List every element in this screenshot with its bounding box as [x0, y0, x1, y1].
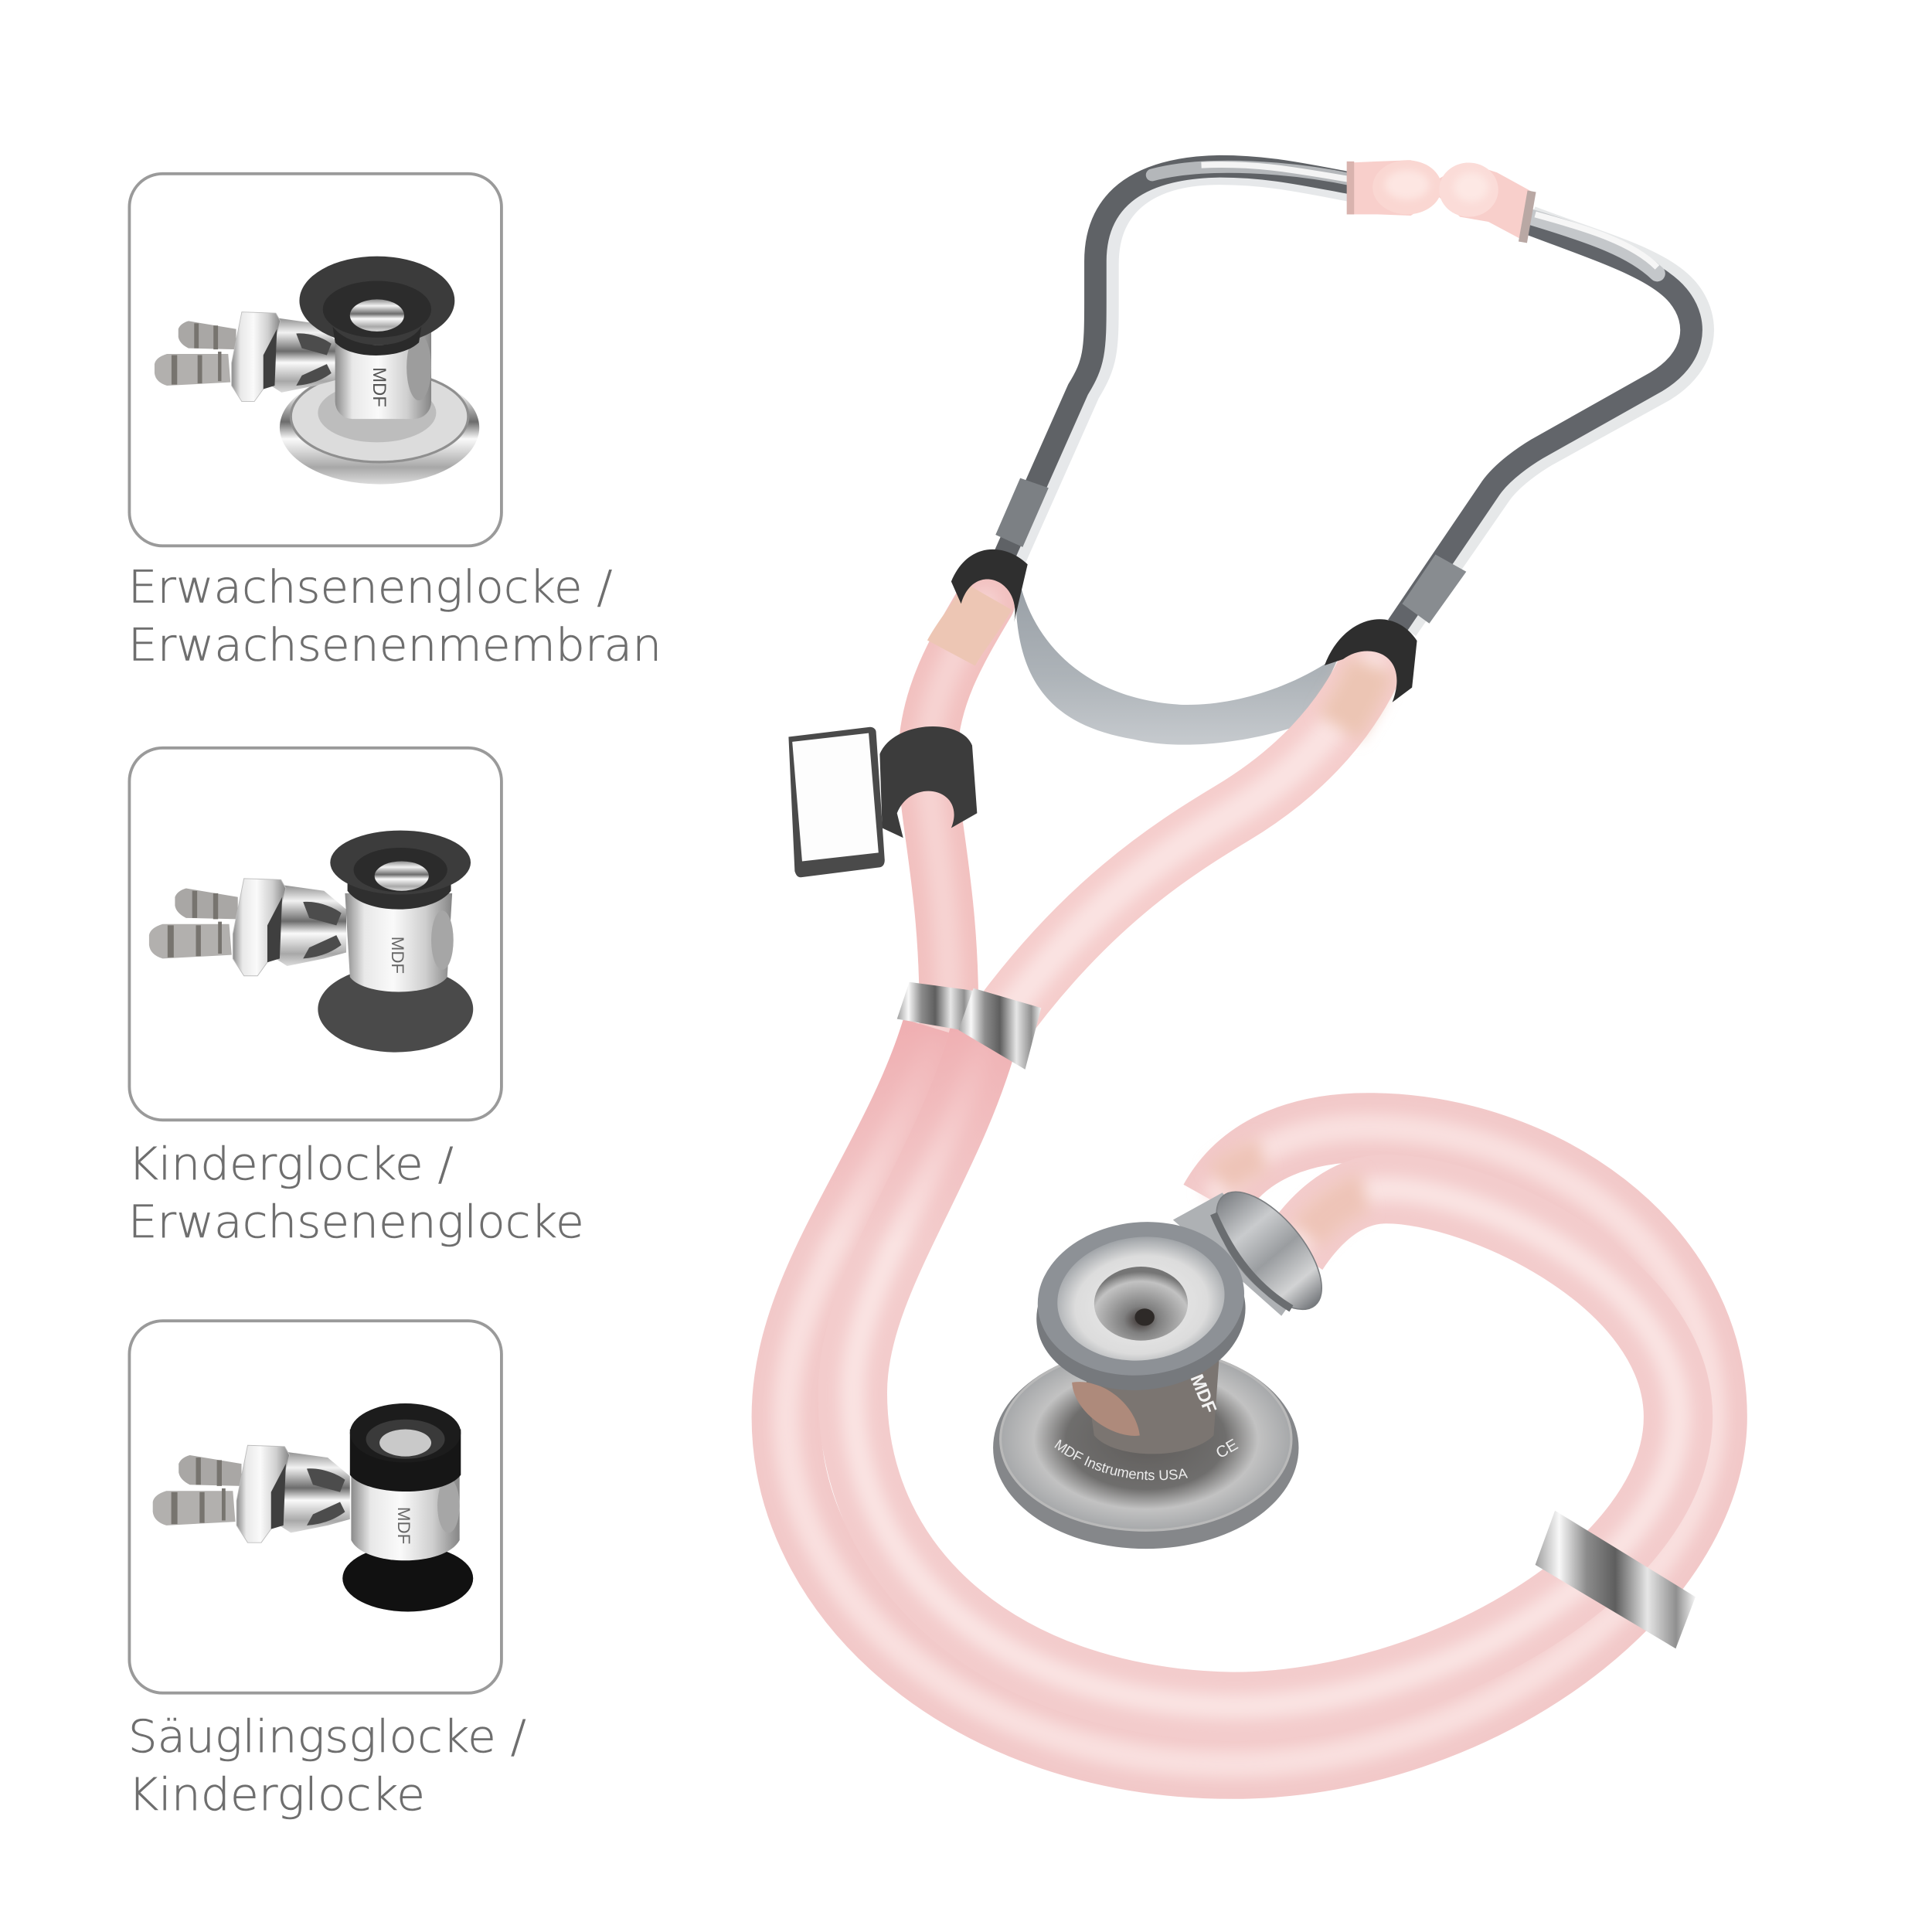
lower diaphragm disc	[993, 1347, 1298, 1549]
tube ring left	[951, 549, 1028, 622]
lower band	[1536, 1511, 1696, 1648]
right binaural	[1397, 214, 1700, 628]
upper left tube	[927, 597, 988, 1029]
metal sleeves	[995, 478, 1049, 547]
icon: chestpiece adult: MDF	[369, 367, 389, 407]
icon: chestpiece pediatric: MDF	[388, 937, 407, 974]
logo on stem: MDF	[1186, 1372, 1220, 1417]
panel: infant bell / pediatric bell	[128, 1321, 526, 1821]
spring band	[1016, 573, 1341, 745]
card frame 1	[129, 174, 502, 546]
panel: adult bell / adult diaphragm	[128, 174, 662, 672]
lower tube outer	[786, 1029, 1713, 1764]
lower tube inner	[852, 1029, 1679, 1706]
caption 2	[128, 1138, 584, 1248]
upper Y band	[897, 982, 1041, 1070]
CE mark: CE	[1213, 1436, 1241, 1462]
caption 1: Erwachsenenglocke /	[128, 561, 612, 614]
caption 3: Kinderglocke	[128, 1768, 425, 1821]
stem	[1082, 1349, 1219, 1454]
card frame 2	[129, 748, 502, 1120]
upper bell head	[1029, 1226, 1253, 1400]
icon: chestpiece adult	[155, 257, 479, 485]
ID clip and tag	[788, 726, 977, 877]
upper right tube	[995, 665, 1372, 1029]
card frame 3	[129, 1321, 502, 1693]
chest piece	[993, 1192, 1322, 1549]
icon: chestpiece infant	[153, 1403, 473, 1611]
icon: chestpiece infant: MDF	[394, 1507, 413, 1544]
earpiece joint beads	[1347, 160, 1536, 243]
caption 1	[128, 561, 662, 672]
caption 3	[128, 1710, 526, 1821]
caption 1: Erwachsenenmembran	[128, 619, 662, 672]
connector stem	[1173, 1175, 1341, 1327]
tube ring right	[1325, 619, 1417, 702]
caption 2: Kinderglocke /	[128, 1138, 454, 1190]
caption 3: Säuglingsglocke /	[128, 1710, 526, 1763]
caption 2: Erwachsenenglocke	[128, 1196, 584, 1248]
engraved brand text: MDF Instruments USA	[1054, 1439, 1188, 1481]
stethoscope illustration	[755, 155, 1743, 1796]
left binaural	[1001, 165, 1353, 570]
icon: chestpiece pediatric	[149, 831, 473, 1053]
panel: pediatric bell / adult bell	[128, 748, 584, 1248]
